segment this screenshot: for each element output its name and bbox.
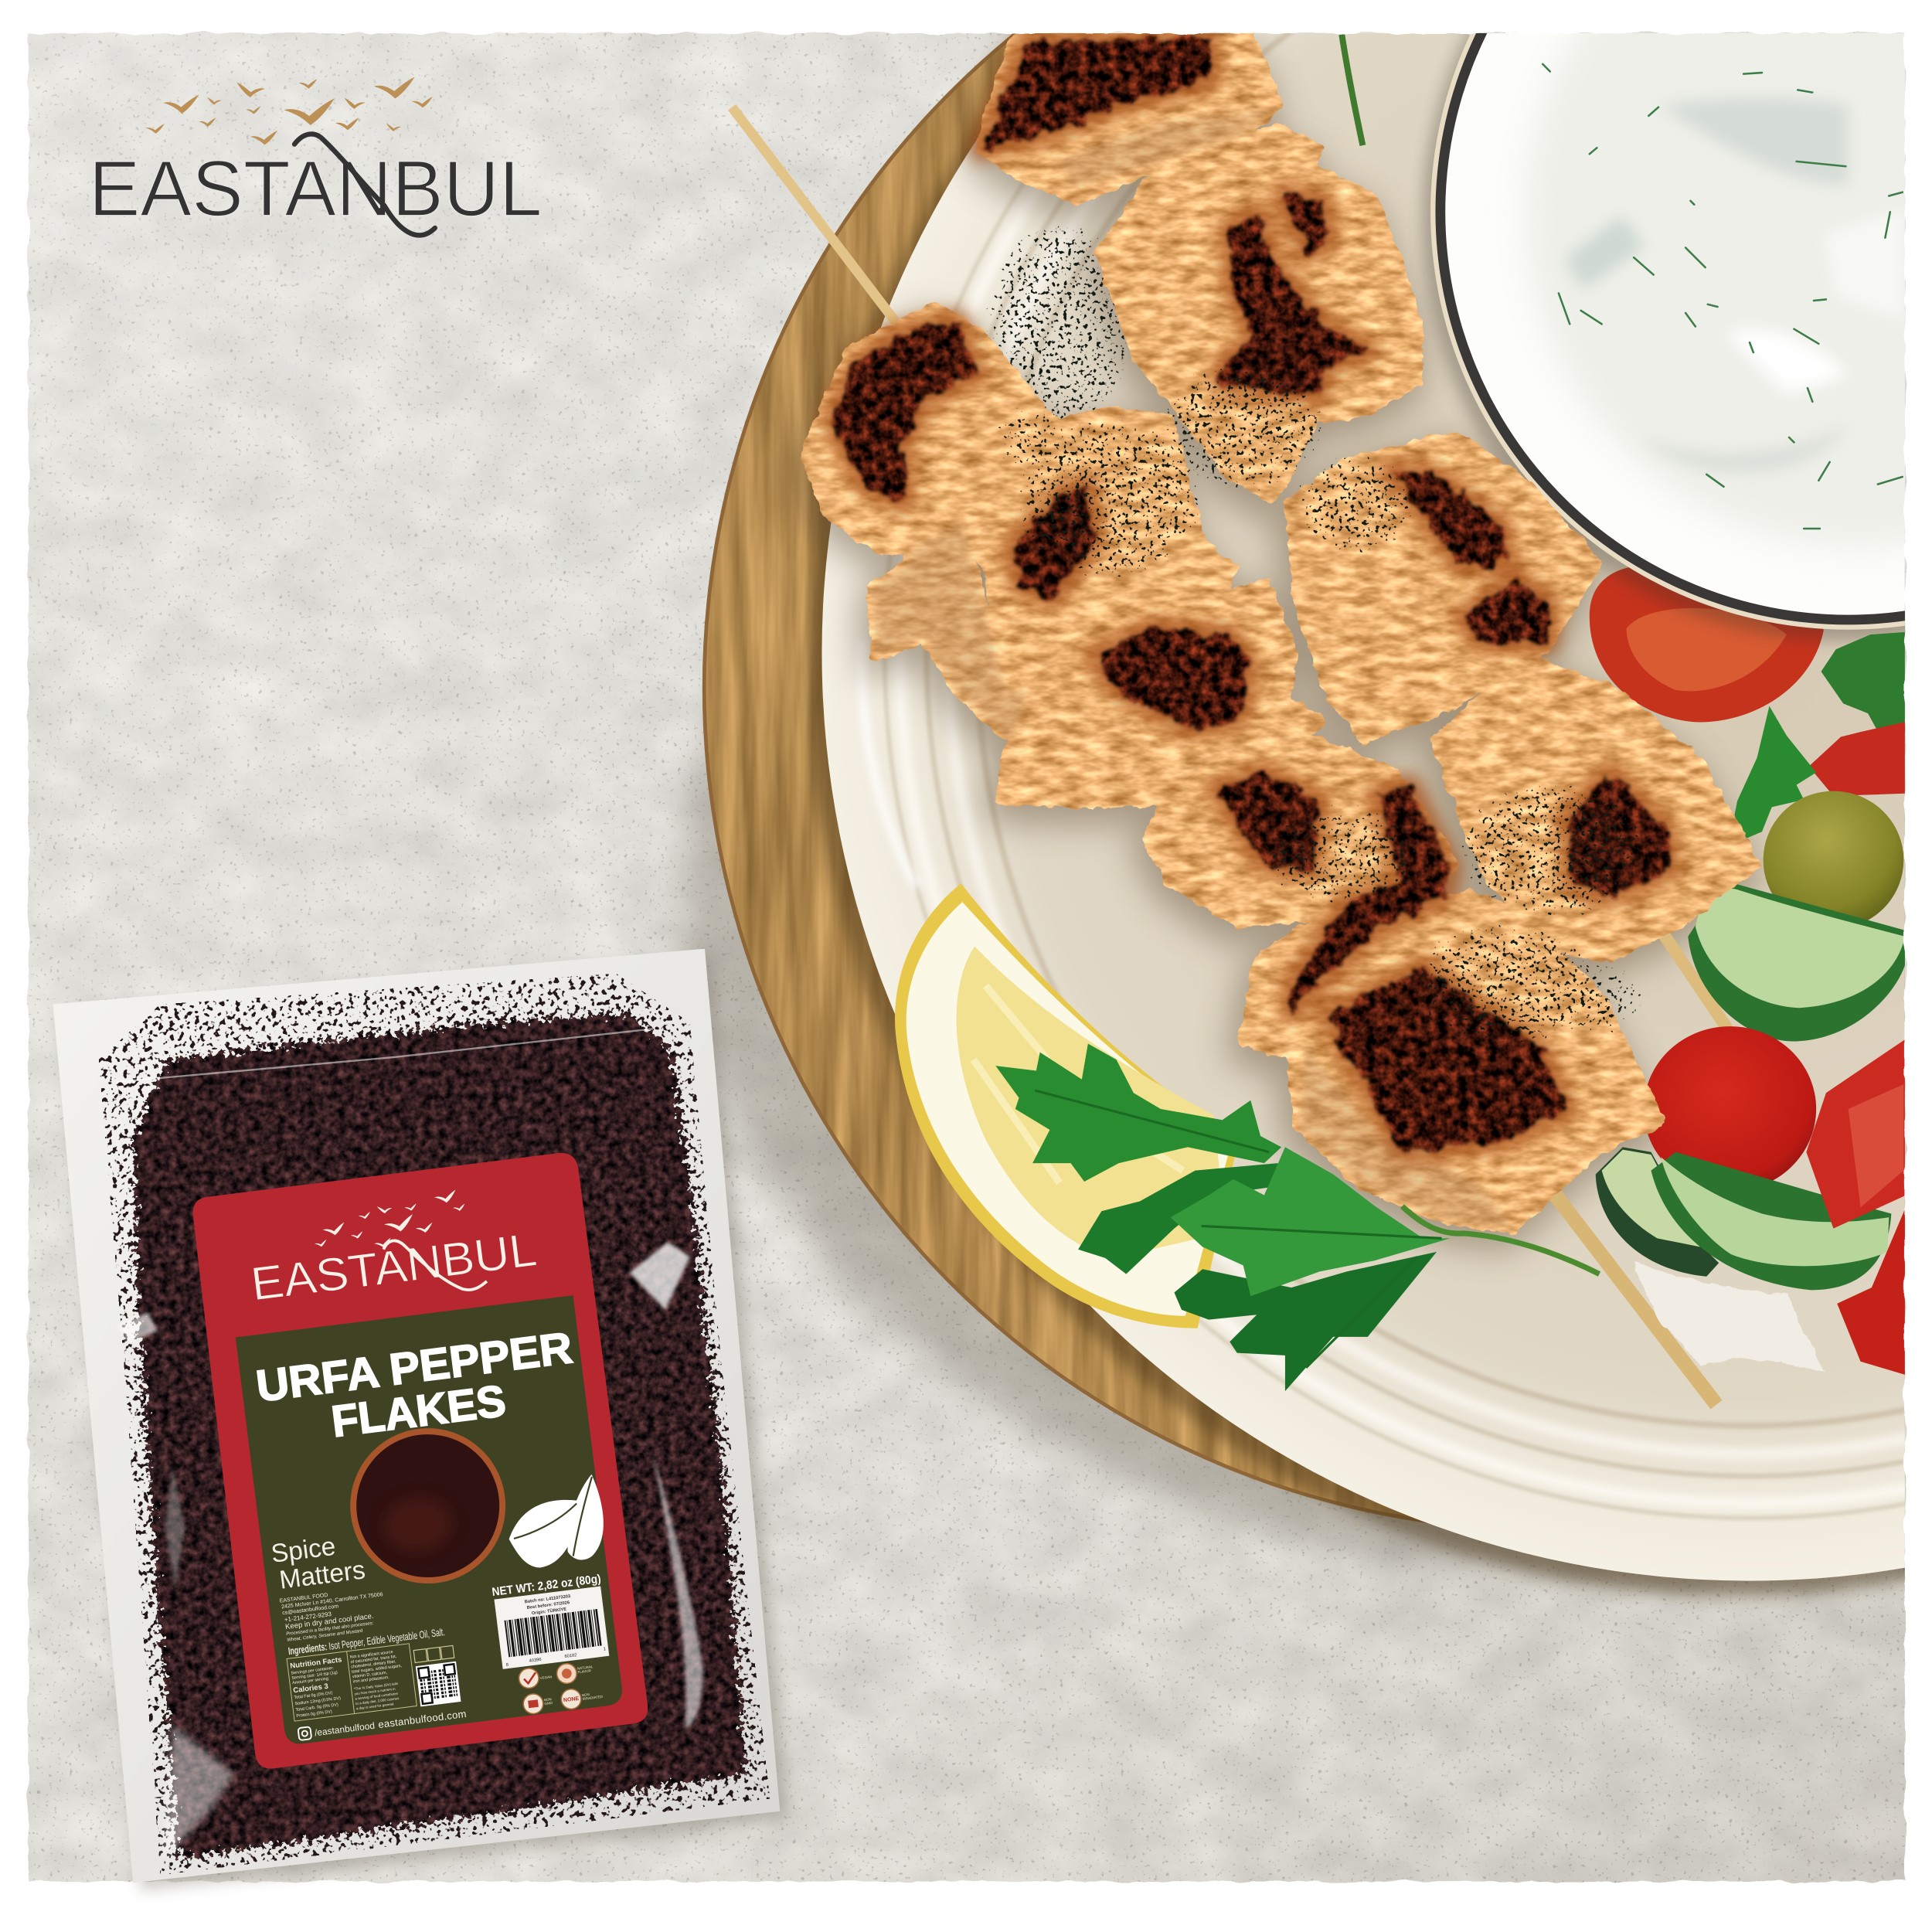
nutrition facts box: Servings per container: bbox=[291, 1666, 335, 1676]
address block: 2425 McIver Ln #140, Carrollton TX 75006 bbox=[281, 1592, 383, 1610]
logo swoosh bbox=[294, 134, 435, 235]
cucumber slice one bbox=[1688, 881, 1907, 1042]
parsley dark leaf bbox=[1174, 1252, 1437, 1391]
certification badges: IRRADIATED bbox=[582, 1695, 603, 1701]
nutrition facts box bbox=[287, 1644, 417, 1721]
parsley upper leaf bbox=[995, 1043, 1281, 1182]
parsley big leaf bbox=[1171, 1147, 1451, 1296]
cucumber slice small bbox=[1596, 1147, 1719, 1277]
yogurt bowl bbox=[1422, 0, 1932, 641]
parsley bbox=[995, 1043, 1600, 1391]
nutrition facts box: cholesterol, dietary fiber, bbox=[351, 1659, 396, 1670]
tagline: Spice bbox=[270, 1532, 337, 1569]
barcode panel bbox=[494, 1586, 609, 1669]
nutrition facts box: a serving of food contributes bbox=[355, 1692, 399, 1701]
black pepper dust bbox=[983, 349, 1657, 1060]
barcode panel: 8 bbox=[506, 1663, 509, 1668]
plate scene bbox=[684, 0, 1932, 1596]
barcode panel: Best before: 07/2026 bbox=[527, 1600, 570, 1611]
address block: Keep in dry and cool place. bbox=[285, 1612, 374, 1631]
char marks bbox=[832, 38, 1671, 1152]
chicken skewer pieces bbox=[804, 36, 1756, 1229]
certification badges: FLAVOR bbox=[577, 1668, 592, 1674]
logo wordmark: EASTANBUL bbox=[89, 145, 543, 233]
pepper scatter on plate bbox=[974, 209, 1146, 444]
tomato whole bbox=[1644, 1026, 1816, 1192]
barcode panel: 40396 bbox=[529, 1658, 542, 1664]
barcode panel: 1 bbox=[604, 1647, 606, 1652]
nutrition facts box: a day is used for general bbox=[356, 1702, 394, 1710]
pale undersides of chicken bbox=[872, 111, 1513, 1229]
product label bbox=[186, 1151, 650, 1770]
product name line 2: FLAKES bbox=[328, 1376, 509, 1447]
yogurt surface bbox=[1526, 0, 1932, 547]
certification badges: NATURAL bbox=[577, 1665, 594, 1671]
certification badges: GMO bbox=[544, 1701, 553, 1706]
tomato wedge bbox=[1806, 1039, 1906, 1229]
instagram icon bbox=[298, 1726, 311, 1740]
lemon wedge bbox=[895, 883, 1238, 1328]
net weight: NET WT: 2,82 oz (80g) bbox=[492, 1573, 602, 1599]
feta bbox=[1633, 1260, 1824, 1372]
herb leaves right bbox=[1727, 632, 1905, 850]
certification badges: NON bbox=[582, 1692, 590, 1697]
bag shadow bbox=[62, 956, 788, 1890]
spice fill bbox=[133, 1013, 747, 1858]
nutrition facts box: *The % Daily Value (DV) tells bbox=[354, 1682, 399, 1691]
nutrition facts box: of saturated fat, trans fat, bbox=[350, 1655, 397, 1665]
char halo bbox=[832, 38, 1671, 1152]
certification badges bbox=[518, 1660, 604, 1715]
QR code bbox=[416, 1662, 461, 1706]
nutrition facts box: Nutrition Facts bbox=[290, 1655, 342, 1671]
barcode panel: Origin: TÜRKİYE bbox=[531, 1607, 567, 1616]
cucumbers and tomatoes bbox=[1596, 881, 1907, 1375]
nutrition facts box: Total Fat 0g (0% DV) bbox=[294, 1691, 333, 1700]
address block: Ingredients: Isot Pepper, Edible Vegetable Oil, Salt. bbox=[287, 1626, 446, 1657]
nutrition facts box: to a daily diet. 2,000 calories bbox=[355, 1696, 400, 1706]
spice bowl bbox=[342, 1419, 515, 1593]
nutrition facts box: Amount per serving: bbox=[292, 1676, 330, 1685]
barcode panel: 60182 bbox=[564, 1653, 577, 1659]
nutrition facts box: Total Carb. 0g (0% DV) bbox=[295, 1702, 338, 1713]
plate bbox=[821, 0, 1932, 1581]
olive bbox=[1764, 791, 1903, 929]
tagline line 2: Matters bbox=[277, 1556, 367, 1595]
food shadow on plate bbox=[798, 48, 1750, 1241]
social handle: /eastanbulfood bbox=[314, 1720, 376, 1738]
nutrition facts box: Calories 3 bbox=[293, 1682, 328, 1695]
address block: Wheat, Celery, Sesame and Mustard bbox=[287, 1629, 363, 1643]
address block: EASTANBUL FOOD bbox=[279, 1593, 328, 1604]
address block: Processed in a facility that also processes: bbox=[286, 1621, 374, 1637]
skewer bbox=[732, 107, 1727, 1405]
film highlights bbox=[117, 1029, 702, 1861]
website: eastanbulfood.com bbox=[377, 1708, 467, 1730]
shadow under board bbox=[668, 699, 1684, 1591]
certification badges: NON bbox=[544, 1697, 552, 1702]
certification badges: VEGAN bbox=[539, 1675, 553, 1680]
tomato under bowl bbox=[1590, 565, 1824, 722]
storage icons bbox=[413, 1645, 454, 1662]
red label card bbox=[186, 1151, 650, 1770]
logo birds bbox=[146, 77, 433, 145]
address block: cs@eastanbulfood.com bbox=[282, 1604, 339, 1616]
label swoosh bbox=[383, 1230, 488, 1300]
white leaves icon bbox=[502, 1474, 608, 1571]
label birds bbox=[310, 1189, 469, 1256]
address block bbox=[279, 1579, 446, 1658]
nutrition facts box: total sugars, added sugars, bbox=[352, 1664, 403, 1675]
loose flakes bbox=[99, 974, 770, 1876]
spice bag bbox=[53, 949, 788, 1890]
brand logo bbox=[89, 77, 543, 235]
nutrition facts box: iron and potassium. bbox=[352, 1675, 389, 1685]
dill flecks bbox=[1543, 64, 1903, 529]
nutrition facts box: Sodium 12mg (0.5% DV) bbox=[294, 1696, 341, 1706]
parsley stem bbox=[1402, 1206, 1600, 1274]
nutrition facts box: Serving size: 1/4 tsp (1g) bbox=[291, 1671, 338, 1681]
parsley lower left leaf bbox=[1078, 1163, 1291, 1274]
olive panel bbox=[236, 1295, 624, 1746]
address block: +1-214-272-9293 bbox=[284, 1611, 332, 1624]
product name: URFA PEPPER bbox=[253, 1323, 575, 1412]
nutrition facts box: Protein 0g (0% DV) bbox=[296, 1709, 332, 1719]
nutrition facts box: vitamin D, calcium, bbox=[352, 1671, 388, 1679]
label brand: EASTANBUL bbox=[248, 1223, 539, 1311]
plate shadow bbox=[807, 0, 1932, 1596]
nutrition facts box: you how much a nutrient in bbox=[354, 1687, 396, 1696]
cucumber slice two bbox=[1651, 1152, 1891, 1290]
clear bag film bbox=[53, 949, 780, 1883]
wood board bbox=[702, 0, 1932, 1532]
barcode panel: Batch no: L411073203 bbox=[525, 1594, 571, 1604]
nutrition facts box: Not a significant source bbox=[349, 1650, 393, 1660]
certification badges: NONE bbox=[563, 1696, 580, 1703]
herb stem bbox=[1342, 35, 1362, 145]
tomato lower bbox=[1837, 1206, 1906, 1375]
